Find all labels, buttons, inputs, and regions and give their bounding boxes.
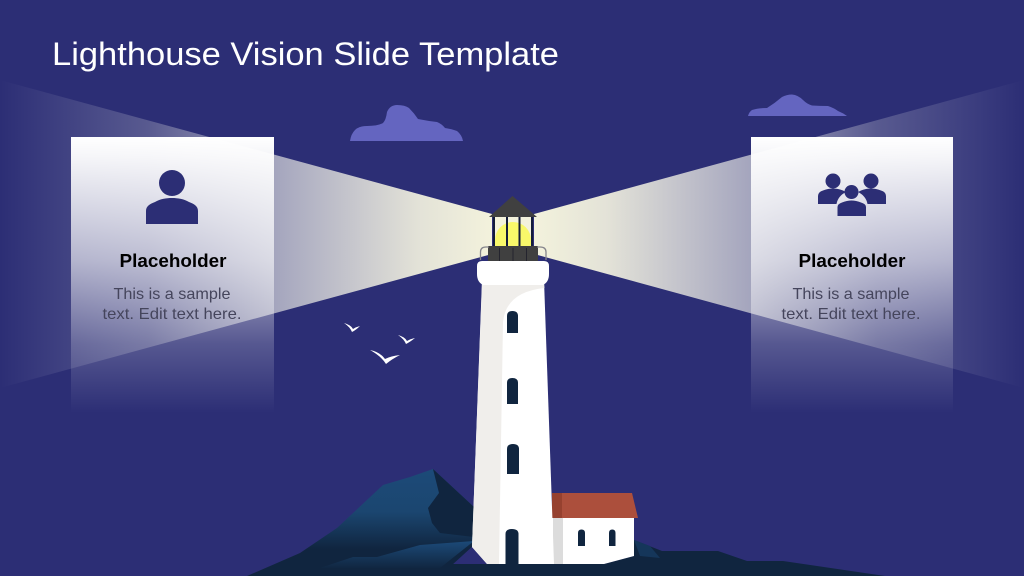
tower body — [472, 280, 554, 564]
left card body text — [102, 286, 242, 323]
roof shadow — [552, 493, 562, 518]
left card body text: This is a sample — [114, 286, 231, 303]
right card heading: Placeholder — [798, 251, 906, 271]
mountain rock face — [247, 469, 474, 576]
light beam: left — [0, 80, 492, 388]
left card body text: text. Edit text here. — [102, 306, 242, 323]
lantern bars — [493, 217, 533, 248]
right card body text: This is a sample — [792, 286, 910, 303]
panel: left card — [71, 137, 274, 413]
house — [552, 493, 638, 564]
house wall shadow — [553, 518, 563, 564]
right shoreline rock — [634, 540, 660, 558]
gallery railing — [480, 247, 546, 260]
right card body text: text. Edit text here. — [782, 306, 920, 323]
mountain and ground — [247, 469, 885, 576]
house windows — [578, 530, 616, 546]
birds — [344, 323, 415, 364]
gallery deck — [488, 246, 538, 261]
gallery dividers — [500, 248, 526, 261]
mountain shadow side — [428, 469, 474, 537]
house wall — [552, 518, 634, 564]
lantern light — [494, 216, 532, 248]
tower windows — [506, 311, 519, 564]
ground — [300, 540, 885, 576]
tower shading — [472, 284, 544, 564]
lighthouse — [472, 196, 554, 564]
panel: right card — [751, 137, 953, 413]
right card body text — [782, 286, 920, 323]
icon: person — [146, 170, 198, 224]
cloud: right — [748, 94, 847, 116]
house roof — [552, 493, 638, 518]
tower head — [477, 261, 549, 285]
light beam: right — [534, 80, 1024, 388]
lantern roof — [489, 196, 537, 217]
icon: group of people — [818, 174, 886, 216]
left card heading: Placeholder — [120, 251, 226, 271]
mountain foreground slope — [320, 541, 474, 568]
title: Lighthouse Vision Slide Template — [52, 36, 559, 72]
cloud: left — [350, 105, 463, 141]
